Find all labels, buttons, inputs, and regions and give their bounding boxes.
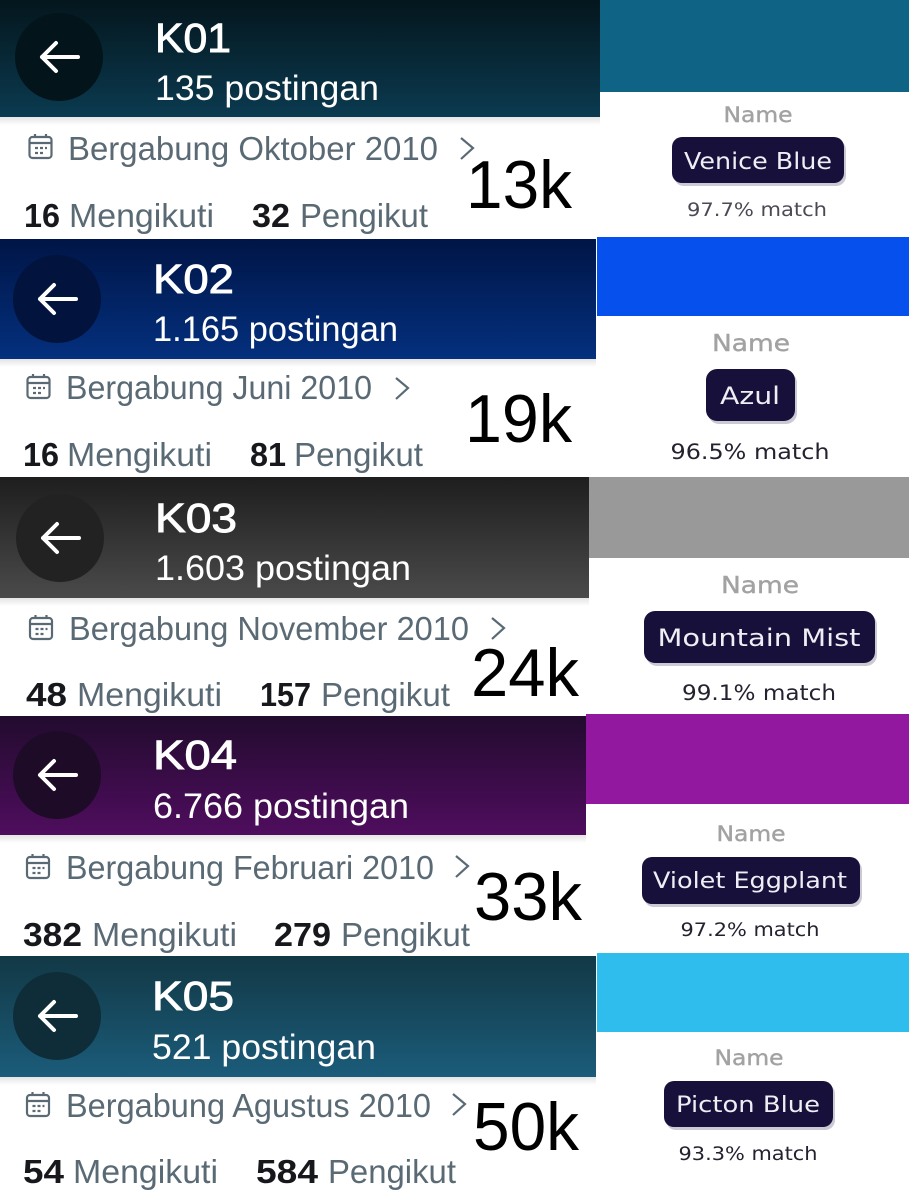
K01 following: 16 xyxy=(24,197,60,234)
K04 big number: 33k xyxy=(474,859,583,935)
K05 post count: 521 postingan xyxy=(152,1028,376,1067)
K03 title: K03 xyxy=(155,495,237,541)
panel: K05 profile xyxy=(0,956,596,1190)
colour name pill: Mountain Mist xyxy=(658,624,860,652)
panel: Violet Eggplant swatch xyxy=(586,714,909,941)
match percent: 93.3% match xyxy=(678,1143,818,1165)
K01 post count: 135 postingan xyxy=(155,69,379,108)
K02 back button xyxy=(13,255,101,343)
K05 big number: 50k xyxy=(473,1089,580,1165)
match percent: 97.7% match xyxy=(687,199,827,221)
K04 followers: Pengikut xyxy=(341,916,470,953)
match percent: 97.2% match xyxy=(680,919,820,941)
K05 header band xyxy=(0,956,596,1077)
K03 post count: 1.603 postingan xyxy=(155,549,411,588)
K02 followers: Pengikut xyxy=(294,436,423,473)
swatch colour xyxy=(586,714,909,804)
K04 following: Mengikuti xyxy=(92,916,237,953)
K01 followers: Pengikut xyxy=(300,197,428,234)
colour name pill: Azul xyxy=(720,382,780,410)
K03 followers: Pengikut xyxy=(321,676,450,713)
swatch colour xyxy=(600,0,909,92)
K03 header band xyxy=(0,477,589,598)
K04 followers xyxy=(274,916,470,953)
K03 following: Mengikuti xyxy=(77,676,222,713)
K01 big number: 13k xyxy=(466,147,573,223)
K02 title: K02 xyxy=(153,256,234,302)
K04 followers: 279 xyxy=(274,916,331,953)
swatch colour xyxy=(597,953,909,1032)
K01 calendar icon xyxy=(30,134,52,158)
K04 following: 382 xyxy=(23,916,82,953)
panel: Picton Blue swatch xyxy=(597,953,909,1165)
Name label: Name xyxy=(714,1046,784,1070)
K01 following: Mengikuti xyxy=(69,197,214,234)
panel: K03 profile xyxy=(0,477,589,713)
K03 back button xyxy=(16,494,104,582)
match percent: 96.5% match xyxy=(670,440,830,464)
K03 followers xyxy=(260,676,450,713)
K05 followers: 584 xyxy=(256,1153,319,1190)
K05 title: K05 xyxy=(152,973,234,1019)
panel: K04 profile xyxy=(0,716,586,953)
match percent: 99.1% match xyxy=(682,681,836,705)
K02 calendar icon xyxy=(28,374,50,398)
K01 back button xyxy=(15,13,103,101)
K01 header band xyxy=(0,0,600,117)
K03 followers: 157 xyxy=(260,676,311,713)
K01 followers: 32 xyxy=(252,197,290,234)
Name label: Name xyxy=(712,331,790,357)
K05 following: Mengikuti xyxy=(73,1153,218,1190)
K03 join date: Bergabung November 2010 xyxy=(69,610,469,647)
colour name pill: Violet Eggplant xyxy=(653,869,847,894)
K02 followers: 81 xyxy=(250,436,286,473)
K02 header band xyxy=(0,239,596,359)
panel: K01 profile xyxy=(0,0,600,234)
K04 chevron xyxy=(456,856,468,877)
K04 title: K04 xyxy=(153,732,237,778)
K01 chevron xyxy=(461,138,473,159)
K01 join date: Bergabung Oktober 2010 xyxy=(68,130,438,167)
Name label: Name xyxy=(724,103,792,127)
colour name pill xyxy=(644,611,877,666)
K02 join date: Bergabung Juni 2010 xyxy=(66,369,372,406)
K05 followers xyxy=(256,1153,456,1190)
K02 big number: 19k xyxy=(465,381,573,457)
K01 title: K01 xyxy=(155,15,231,61)
K04 back button xyxy=(13,731,101,819)
panel: Venice Blue swatch xyxy=(600,0,909,221)
K05 following: 54 xyxy=(23,1153,65,1190)
colour name pill: Venice Blue xyxy=(684,149,832,175)
colour name pill: Picton Blue xyxy=(676,1093,820,1118)
K05 chevron xyxy=(453,1094,465,1115)
colour name pill xyxy=(664,1081,835,1130)
K04 following xyxy=(23,916,237,953)
K02 following: 16 xyxy=(23,436,59,473)
panel: Mountain Mist swatch xyxy=(589,477,909,705)
Name label: Name xyxy=(716,822,786,846)
K05 calendar icon xyxy=(27,1092,49,1116)
colour name pill xyxy=(642,857,862,907)
K04 header band xyxy=(0,716,586,835)
swatch colour xyxy=(597,237,909,316)
K05 back button xyxy=(13,972,101,1060)
K04 join date: Bergabung Februari 2010 xyxy=(66,849,434,886)
swatch colour xyxy=(589,477,909,558)
colour name pill xyxy=(706,369,797,424)
panel: Azul swatch xyxy=(597,237,909,464)
K03 calendar icon xyxy=(30,615,52,639)
K04 post count: 6.766 postingan xyxy=(153,787,409,826)
K03 following: 48 xyxy=(26,676,67,713)
Name label: Name xyxy=(721,573,799,599)
K03 big number: 24k xyxy=(471,635,580,711)
colour name pill xyxy=(672,137,846,186)
K04 calendar icon xyxy=(27,854,49,878)
K02 chevron xyxy=(396,378,408,399)
panel: K02 profile xyxy=(0,239,596,473)
K03 chevron xyxy=(492,618,504,639)
K02 following: Mengikuti xyxy=(67,436,212,473)
K05 join date: Bergabung Agustus 2010 xyxy=(66,1087,431,1124)
K02 post count: 1.165 postingan xyxy=(153,310,398,349)
K05 followers: Pengikut xyxy=(328,1153,456,1190)
